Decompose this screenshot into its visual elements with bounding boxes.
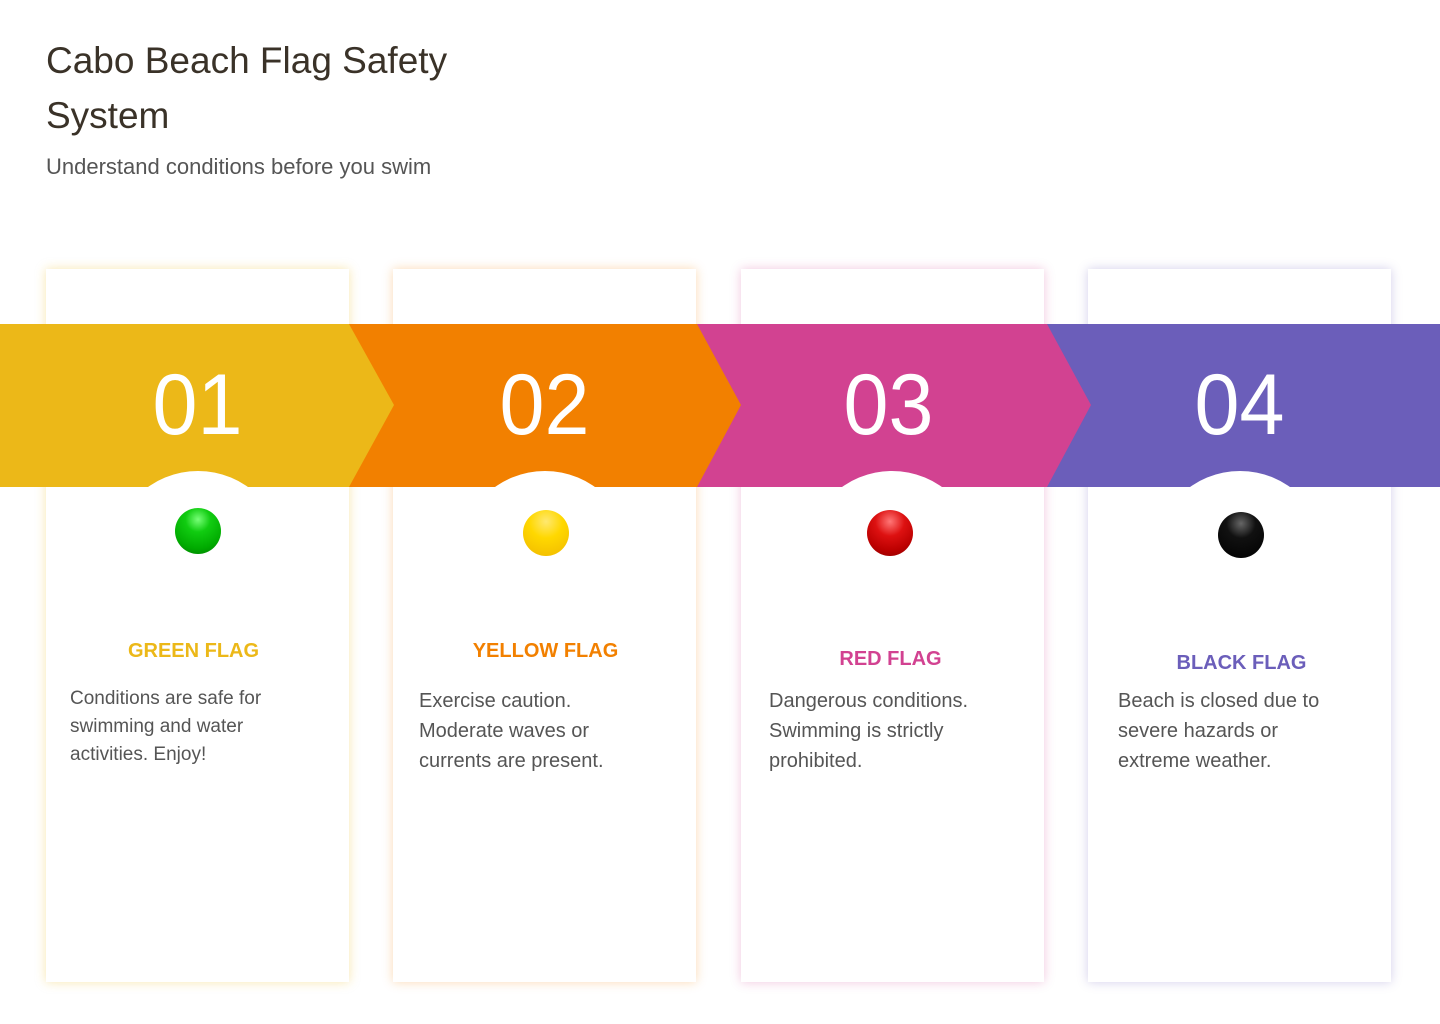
card: green bbox=[46, 269, 349, 982]
icon: black dot bbox=[1218, 512, 1264, 558]
text: black bbox=[1118, 690, 1319, 772]
card: red bbox=[741, 269, 1044, 982]
text: red: Dangerous conditions. bbox=[769, 690, 968, 712]
text: yellow: Moderate waves or bbox=[419, 720, 589, 742]
text: red bbox=[769, 690, 968, 772]
text: black: Beach is closed due to bbox=[1118, 690, 1319, 712]
title: Cabo Beach Flag Safety System bbox=[46, 40, 447, 136]
text: red: prohibited. bbox=[769, 750, 862, 772]
heading: green: GREEN FLAG bbox=[128, 640, 259, 662]
text: black: severe hazards or bbox=[1118, 720, 1278, 742]
text: green: swimming and water bbox=[70, 716, 243, 737]
number 01: 01 bbox=[153, 357, 242, 453]
heading: yellow: YELLOW FLAG bbox=[473, 640, 618, 662]
icon: green dot bbox=[175, 508, 221, 554]
arrow band bbox=[0, 324, 1440, 487]
text: green: activities. Enjoy! bbox=[70, 744, 206, 765]
text: red: Swimming is strictly bbox=[769, 720, 943, 742]
text: yellow: currents are present. bbox=[419, 750, 604, 772]
text: green: Conditions are safe for bbox=[70, 688, 261, 709]
text: green bbox=[70, 688, 261, 765]
subtitle: Understand conditions before you swim bbox=[46, 154, 431, 179]
card: yellow bbox=[393, 269, 696, 982]
heading: black: BLACK FLAG bbox=[1176, 652, 1306, 674]
number 04: 04 bbox=[1195, 357, 1284, 453]
text: black: extreme weather. bbox=[1118, 750, 1271, 772]
number 03: 03 bbox=[844, 357, 933, 453]
text: yellow: Exercise caution. bbox=[419, 690, 571, 712]
icon: red dot bbox=[867, 510, 913, 556]
card: black bbox=[1088, 269, 1391, 982]
text: yellow bbox=[419, 690, 604, 772]
icon: yellow dot bbox=[523, 510, 569, 556]
heading: red: RED FLAG bbox=[839, 648, 942, 670]
number 02: 02 bbox=[500, 357, 589, 453]
